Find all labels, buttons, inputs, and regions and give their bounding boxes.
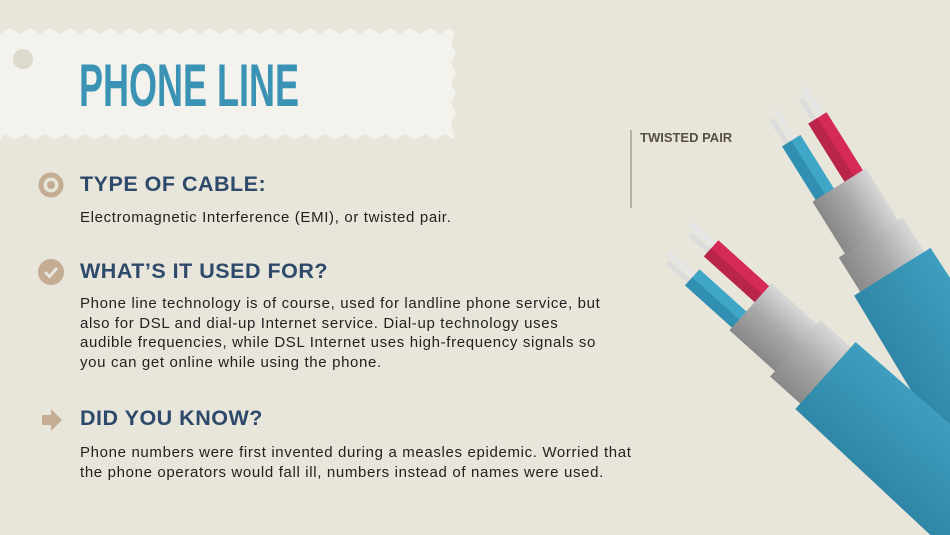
icon: check bbox=[38, 259, 64, 285]
icon: arrow bbox=[42, 409, 62, 431]
heading: used for: WHAT’S IT USED FOR? bbox=[80, 259, 328, 283]
text: used for: you can get online while using the phone. bbox=[80, 354, 382, 370]
label: twisted pair: TWISTED PAIR bbox=[640, 130, 732, 145]
cable: lower bbox=[642, 203, 950, 535]
text: used for bbox=[80, 295, 600, 370]
text: type of cable: Electromagnetic Interference (EMI), or twisted pair. bbox=[80, 209, 451, 226]
title banner bbox=[0, 28, 456, 140]
text: did you know: the phone operators would fall ill, numbers instead of names were used. bbox=[80, 464, 604, 480]
text: used for: audible frequencies, while DSL Internet uses high-frequency signals so bbox=[80, 334, 596, 351]
text: used for: also for DSL and dial-up Internet service. Dial-up technology uses bbox=[80, 314, 558, 332]
heading: did you know: DID YOU KNOW? bbox=[80, 406, 263, 430]
icon: target bbox=[38, 172, 64, 198]
label: twisted pair bbox=[630, 130, 732, 208]
text: did you know: Phone numbers were first invented during a measles epidemic. Worried that bbox=[80, 444, 632, 461]
text: did you know bbox=[80, 444, 632, 480]
heading: type of cable: TYPE OF CABLE: bbox=[80, 172, 266, 196]
text: used for: Phone line technology is of course, used for landline phone service, but bbox=[80, 295, 600, 312]
title: PHONE LINE bbox=[79, 52, 299, 119]
cable: upper bbox=[743, 74, 950, 508]
